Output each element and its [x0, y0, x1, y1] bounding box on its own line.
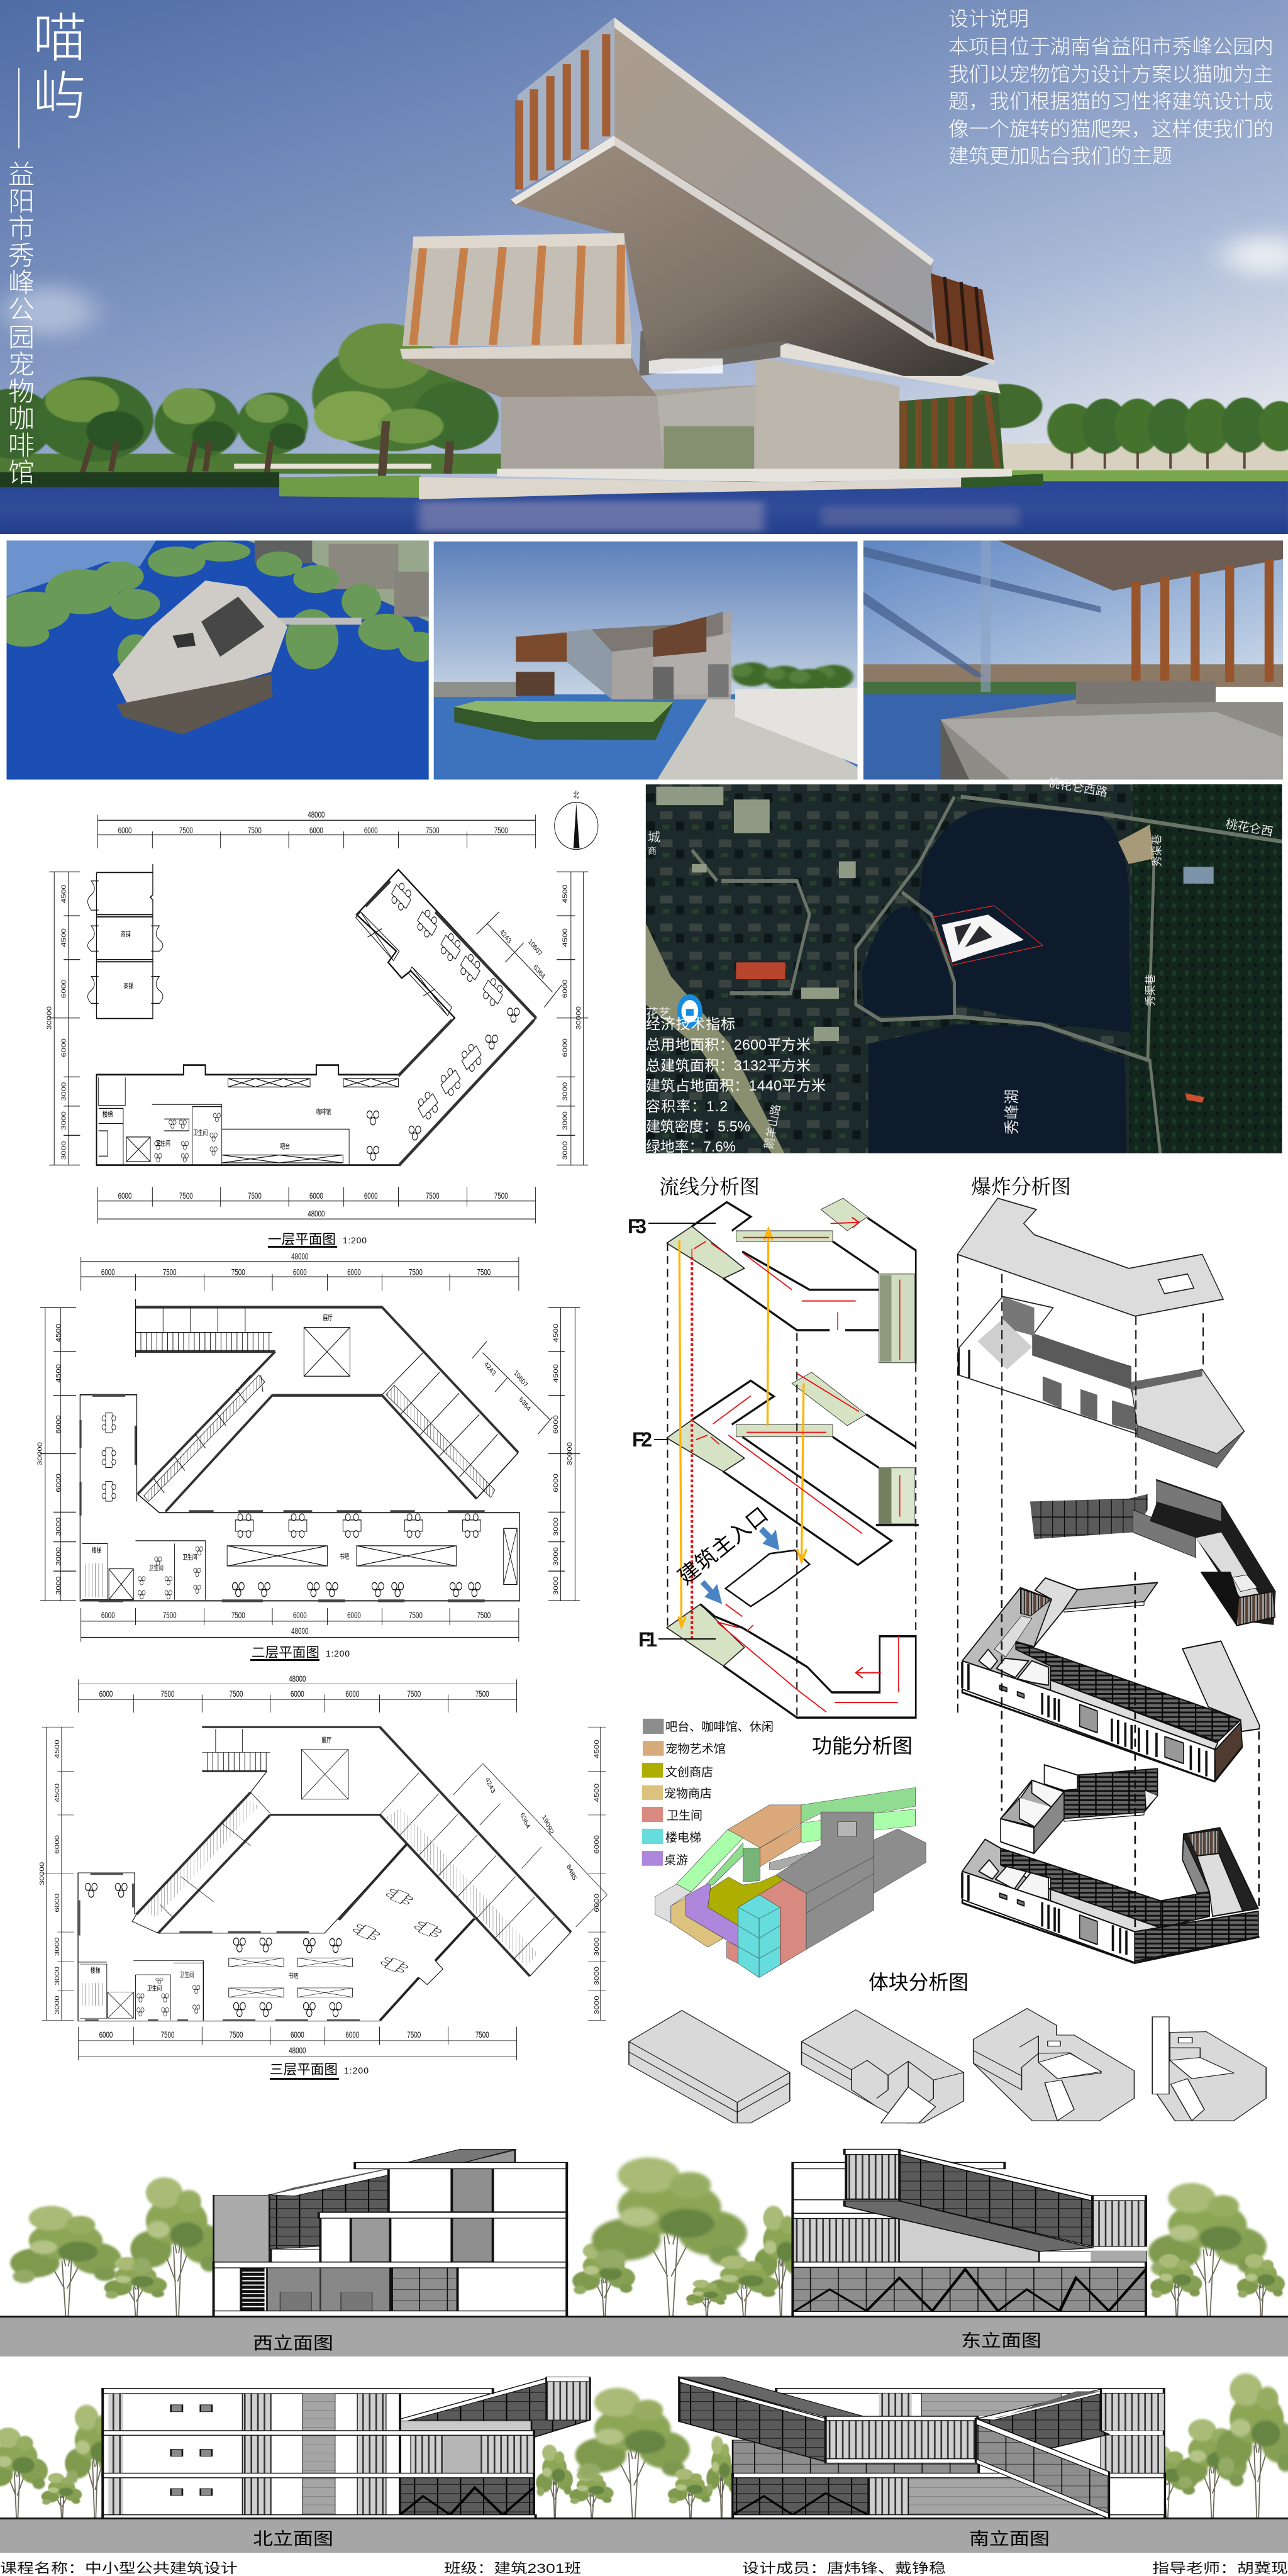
sub: first floor dimension lines: 4500	[60, 884, 67, 903]
sub: third floor dimension labels: 楼梯	[91, 1966, 100, 1974]
sub: third floor dimension labels: 6000	[99, 1690, 113, 1699]
footer: course information: 指导老师：胡冀现	[1152, 2561, 1288, 2576]
sub: second floor dimension lines: 7500	[409, 1268, 423, 1277]
sub: first floor dimension lines: 7500	[179, 826, 193, 835]
sub: first floor dimension lines: 6000	[309, 1192, 323, 1201]
sub: first floor dimension lines: 6000	[118, 1192, 132, 1201]
sub: second floor dimension lines: 7500	[477, 1611, 491, 1621]
sub: tree belt left	[0, 377, 308, 462]
sub: second floor diagonal dimension	[472, 1341, 552, 1434]
sub: second floor walls: 展厅	[323, 1314, 333, 1321]
sub: main building outline: 卫生间	[156, 1139, 170, 1147]
sub: first floor dimension lines: 3000	[562, 1111, 569, 1130]
sub: diagonal dimension	[477, 912, 562, 1008]
sub: ground level	[962, 1828, 1259, 1963]
footer: course information: 设计成员：唐炜锋、戴铮稳	[742, 2561, 946, 2576]
sub: third floor dimension labels: 6000	[54, 1893, 61, 1913]
sub: third floor dimension labels: 6000	[345, 1690, 360, 1699]
sub: third floor dimension labels: 48000	[289, 2046, 306, 2055]
sub: second floor dimension lines: 3000	[55, 1576, 62, 1595]
sub: shops block	[87, 864, 163, 1018]
sub: first floor dimension lines: 7500	[494, 826, 508, 835]
sub: second floor dimension lines: 7500	[231, 1268, 245, 1277]
sub: second floor dimension lines: 6000	[553, 1473, 559, 1492]
sub: second floor dimension lines: 4500	[553, 1363, 559, 1383]
diagram: function massing	[655, 1787, 926, 1977]
footer: course information: 班级：建筑2301班	[444, 2561, 581, 2576]
heading: function analysis: 功能分析图	[812, 1735, 913, 1757]
sub: third floor dimension labels: 6000	[291, 2031, 304, 2040]
heading: first floor plan: 一层平面图	[268, 1231, 336, 1247]
floor plan: third floor	[39, 1675, 607, 2080]
text block: economic indicators: 绿地率：7.6%	[646, 1138, 736, 1155]
heading: first floor plan	[268, 1231, 367, 1248]
sub: third floor dimension labels: 8485	[565, 1863, 577, 1882]
sub: third floor dimension labels: 展厅	[321, 1736, 331, 1744]
icon: blue entrance arrows	[701, 1527, 779, 1604]
sub: map place names: 秀渠巷	[1145, 974, 1157, 1006]
heading: circulation analysis: 流线分析图	[659, 1175, 760, 1198]
sub: second floor dimension lines: 6000	[293, 1268, 307, 1277]
sub: second floor dimension lines: 30000	[567, 1441, 574, 1465]
sub: diagonal dimension: 10607	[527, 937, 543, 958]
text block: economic indicators: 建筑占地面积：1440平方米	[646, 1077, 826, 1094]
heading: second floor plan	[250, 1645, 350, 1661]
sub: first floor dimension lines: 48000	[308, 810, 325, 819]
sub: third floor lines and walls	[42, 1679, 607, 2060]
sub: first floor dimension lines: 3000	[60, 1141, 67, 1160]
sub: first floor dimension lines: 3000	[60, 1111, 67, 1130]
sub: F3 level	[667, 1198, 916, 1364]
sub: first floor dimension lines: 6000	[562, 979, 569, 998]
sub: third floor dimension labels: 48000	[289, 1675, 306, 1684]
sub: west trees	[10, 2157, 747, 2317]
sub: big foreground tree	[312, 323, 499, 451]
sub: second level upper wing	[1016, 1572, 1275, 1731]
sub: third floor dimension labels: 7500	[161, 1690, 175, 1699]
sub: third floor dimension labels: 卫生间	[179, 1970, 194, 1979]
elevation: north	[0, 2377, 614, 2519]
sub: first floor dimension lines: 4500	[562, 928, 569, 947]
sub: first floor dimension lines: 7500	[248, 1192, 262, 1201]
sub: second floor dimension lines: 4500	[55, 1363, 62, 1383]
sub: first floor dimension lines: 6000	[60, 1038, 67, 1057]
legend: function colours: 宠物艺术馆	[665, 1742, 726, 1756]
sub: second floor dimension lines: 3000	[553, 1546, 559, 1566]
sub: third floor dimension labels: 4500	[54, 1740, 61, 1758]
text block: design description	[948, 8, 1274, 167]
title: 喵屿	[33, 9, 86, 126]
legend: function colours: 楼电梯	[665, 1831, 701, 1845]
sub: map place names: 秀峰湖	[1004, 1089, 1021, 1135]
decorative title rule	[18, 68, 19, 148]
sub: second level main floor	[962, 1587, 1242, 1782]
sub: main building outline	[96, 870, 536, 1165]
elevation: east	[686, 2149, 1285, 2317]
sub: second floor diagonal dimension: 6364	[518, 1396, 531, 1413]
subtitle: vertical project name: 益阳市秀峰公园宠物咖啡馆	[8, 160, 35, 487]
sub: east trees	[686, 2183, 1285, 2317]
sub: tree belt right	[970, 384, 1288, 453]
elevation: south	[575, 2373, 1288, 2519]
heading: third floor plan	[270, 2062, 369, 2080]
sub: first floor dimension lines: 4500	[562, 884, 569, 903]
sub: shops block: 商铺	[124, 982, 133, 990]
sub: second floor dimension lines: 48000	[291, 1627, 309, 1636]
footer: course information	[0, 2561, 1288, 2576]
sub: third level parts	[958, 1296, 1244, 1468]
sub: second floor dimension lines: 6000	[553, 1415, 559, 1434]
sub: third floor dimension labels: 4243	[484, 1776, 496, 1795]
sub: third floor dimension labels: 4500	[594, 1783, 601, 1802]
sub: first floor dimension lines: 3000	[562, 1141, 569, 1160]
legend: function colours: 宠物商店	[664, 1787, 712, 1801]
sub: second floor dimension lines: 7500	[409, 1611, 423, 1621]
sub: third floor dimension labels: 6000	[54, 1835, 61, 1854]
sub: first floor dimension lines: 7500	[248, 826, 262, 835]
sub: main building outline: 楼梯	[103, 1109, 113, 1119]
heading: second floor plan: 1:200	[326, 1648, 350, 1658]
sub: massing step four	[1152, 2017, 1266, 2121]
heading: exploded analysis: 爆炸分析图	[971, 1175, 1071, 1198]
sub: dashed level connectors	[667, 1243, 916, 1718]
text block: design description: 设计说明	[948, 8, 1029, 30]
ground band: upper elevations	[0, 2316, 1288, 2357]
panel: hero rendering	[0, 0, 1288, 534]
sub: second floor dimension lines: 7500	[163, 1611, 177, 1621]
sub: third floor dimension labels: 6000	[291, 1690, 304, 1699]
sub: third floor dimension labels: 30000	[39, 1862, 45, 1885]
sub: first floor dimension lines: 6000	[60, 979, 67, 998]
diagram: exploded axonometric	[957, 1198, 1276, 1963]
sub: second floor dimension lines: 6000	[101, 1268, 115, 1277]
sub: first floor dimension lines: 30000	[46, 1006, 53, 1030]
sub: main building outline: 吧台	[280, 1142, 290, 1150]
sub: third floor dimension labels: 4500	[54, 1783, 61, 1802]
sub: third floor dimension labels: 3000	[54, 1937, 61, 1956]
sub: first floor dimension lines: 6000	[309, 826, 323, 835]
label: east elevation: 东立面图	[961, 2331, 1041, 2350]
sub: map place names: 桃花仑西	[1224, 817, 1274, 839]
sub: third floor dimension labels: 书吧	[288, 1972, 299, 1980]
text block: economic indicators: 总建筑面积：3132平方米	[646, 1057, 811, 1074]
sub: first floor dimension lines: 3000	[60, 1082, 67, 1101]
sub: second floor walls: 书吧	[339, 1553, 350, 1560]
sub: map place names	[646, 775, 1274, 1150]
sub: first floor dimension lines: 6000	[562, 1038, 569, 1057]
sub: map place names: 城	[648, 830, 660, 845]
text block: design description: 建筑更加贴合我们的主题	[948, 145, 1172, 167]
icon: north arrow: 北	[573, 791, 579, 800]
sub: second floor dimension lines: 6000	[347, 1268, 361, 1277]
text block: economic indicators: 总用地面积：2600平方米	[646, 1036, 811, 1053]
sub: third floor dimension labels: 6364	[519, 1811, 531, 1831]
sub: map place names: 鹅羊山路	[762, 1103, 782, 1150]
heading: second floor plan: 二层平面图	[252, 1645, 319, 1660]
sub: third floor dimension labels: 卫生间	[147, 1984, 162, 1992]
sub: orange vertical routes	[679, 1229, 807, 1626]
sub: second floor dimension lines: 6000	[55, 1415, 62, 1434]
legend: function colours	[642, 1719, 774, 1867]
sub: third floor dimension labels: 7500	[161, 2031, 175, 2040]
label: level names	[628, 1215, 716, 1651]
sub: lower glass floor	[501, 385, 760, 469]
heading: first floor plan: 1:200	[343, 1235, 367, 1245]
sub: second floor dimension lines: 6000	[293, 1611, 307, 1621]
sub: second floor walls: 卫生间	[148, 1563, 164, 1572]
diagram: circulation analysis	[628, 1198, 919, 1718]
sub: second floor dimension lines: 7500	[477, 1268, 491, 1277]
sub: first floor dimension lines	[46, 810, 588, 1223]
sub: second floor walls	[80, 1299, 519, 1601]
sub: third floor dimension labels: 6000	[345, 2031, 360, 2040]
sub: second floor dimension lines: 48000	[291, 1252, 309, 1262]
ground band: lower elevations	[0, 2518, 1288, 2553]
label: level names: F3	[628, 1215, 647, 1238]
heading: third floor plan: 1:200	[344, 2065, 369, 2075]
title: 喵屿: 屿	[33, 67, 86, 126]
sub: second floor walls: 楼梯	[92, 1546, 101, 1554]
sub: south trees	[575, 2373, 1288, 2519]
sub: third floor dimension labels: 7500	[407, 2031, 421, 2040]
legend: function colours: 文创商店	[665, 1765, 713, 1779]
sub: second floor diagonal dimension: 10607	[513, 1368, 529, 1390]
sub: first floor dimension lines: 6000	[364, 826, 378, 835]
sub: massing step two	[802, 2010, 963, 2123]
sub: third floor dimension labels: 7500	[230, 2031, 243, 2040]
sub: second floor dimension lines: 7500	[163, 1268, 177, 1277]
heading: third floor plan: 三层平面图	[270, 2062, 338, 2077]
text block: economic indicators: 容积率：1.2	[646, 1098, 728, 1114]
sub: third floor dimension labels: 7500	[407, 1690, 421, 1699]
sub: third floor dimension labels: 6000	[594, 1893, 601, 1913]
sub: shops block: 商铺	[121, 930, 131, 938]
sub: red dotted vertical route	[690, 1257, 694, 1639]
sub: third floor dimension labels: 3000	[594, 1996, 601, 2014]
text block: economic indicators: 建筑密度：5.5%	[646, 1118, 750, 1135]
legend: function colours: 卫生间	[667, 1809, 702, 1823]
sub: third floor dimension labels: 7500	[475, 2031, 489, 2040]
sub: map place names: 花艺	[646, 1006, 671, 1021]
sub: first floor dimension lines: 7500	[426, 826, 440, 835]
sub: first floor dimension lines: 3000	[562, 1082, 569, 1101]
sub: massing step one	[629, 2011, 790, 2123]
sub: second floor diagonal dimension: 4243	[483, 1360, 497, 1378]
text block: design description: 我们以宠物馆为设计方案以猫咖为主	[948, 63, 1274, 86]
sub: third floor dimension labels: 3000	[594, 1966, 601, 1985]
sub: lower-left box	[402, 234, 633, 346]
sub: upper cantilever	[509, 136, 996, 376]
sub: third floor dimension labels: 19092	[541, 1813, 555, 1836]
sub: second floor dimension lines: 3000	[553, 1517, 559, 1536]
text block: design description: 像一个旋转的猫爬架，这样使我们的	[948, 118, 1274, 140]
heading: massing analysis: 体块分析图	[869, 1971, 969, 1994]
sub: third floor dimension labels: 6000	[99, 2031, 113, 2040]
photo: aerial view	[0, 540, 438, 780]
label: level names: F1	[638, 1628, 657, 1651]
sub: first floor dimension lines: 7500	[426, 1192, 440, 1201]
sub: map place names: 秀渠巷	[1151, 835, 1163, 867]
sub: third floor dimension labels: 3000	[594, 1937, 601, 1956]
photo: lakeside view	[434, 541, 858, 780]
sub: second floor dimension lines: 7500	[231, 1611, 245, 1621]
sub: diagonal dimension: 4243	[499, 928, 513, 946]
sub: second floor dimension lines: 6000	[55, 1473, 62, 1492]
sub: massing step three	[974, 2009, 1134, 2121]
sub: first floor dimension lines: 6000	[364, 1192, 378, 1201]
sub: third floor dimension labels: 4500	[594, 1740, 601, 1758]
elevation: west	[10, 2149, 747, 2317]
sub: first floor dimension lines: 30000	[575, 1006, 582, 1030]
sub: third floor dimension labels: 6000	[594, 1835, 601, 1854]
sub: second floor dimension lines: 3000	[55, 1517, 62, 1536]
sub: second floor dimension lines: 3000	[553, 1576, 559, 1595]
sub: third floor dimension labels: 7500	[475, 1690, 489, 1699]
sub: second floor walls: 卫生间	[182, 1553, 197, 1561]
sub: second floor dimension lines: 30000	[36, 1441, 43, 1465]
text block: economic indicators	[646, 1016, 826, 1155]
diagram: massing evolution	[629, 2009, 1266, 2123]
legend: function colours: 桌游	[664, 1853, 688, 1867]
sub: second floor dimension lines	[36, 1252, 580, 1642]
sub: main building outline: 卫生间	[193, 1128, 208, 1136]
sub: third floor dimension labels: 3000	[54, 1996, 61, 2014]
sub: second level pieces	[1030, 1479, 1276, 1625]
sub: map place names: 桃花仑西路	[1047, 775, 1109, 799]
sub: second floor dimension lines: 6000	[347, 1611, 361, 1621]
sub: second floor dimension lines: 4500	[553, 1323, 559, 1342]
sub: second floor dimension lines: 3000	[55, 1546, 62, 1566]
sub: first floor dimension lines: 6000	[118, 826, 132, 835]
label: north elevation: 北立面图	[253, 2529, 333, 2548]
sub: first floor dimension lines: 4500	[60, 928, 67, 947]
sub: map place names: 商	[648, 846, 657, 856]
sub: third floor dimension labels: 7500	[230, 1690, 243, 1699]
text block: design description: 题，我们根据猫的习性将建筑设计成	[948, 90, 1274, 113]
sub: red arrows	[692, 1223, 900, 1632]
floor plan: second floor	[36, 1252, 580, 1661]
photo: interior view	[863, 540, 1283, 780]
sub: diagonal dimension: 6364	[532, 963, 546, 981]
footer: course information: 课程名称：中小型公共建筑设计	[0, 2561, 238, 2576]
text block: design description: 本项目位于湖南省益阳市秀峰公园内	[948, 35, 1274, 58]
sub: third floor dimension labels: 3000	[54, 1966, 61, 1985]
sub: first floor dimension lines: 7500	[494, 1192, 508, 1201]
label: south elevation: 南立面图	[969, 2529, 1050, 2548]
sub: first floor dimension lines: 48000	[308, 1209, 325, 1219]
icon: north arrow	[555, 791, 598, 850]
sub: north trees	[0, 2405, 614, 2519]
sub: F1 level	[667, 1550, 916, 1718]
label: main entrance: 建筑主入口	[674, 1502, 773, 1589]
sub: F2 level	[667, 1372, 919, 1565]
sub: main building outline: 咖啡馆	[316, 1108, 331, 1116]
site map: satellite image with indicators	[646, 775, 1282, 1155]
label: level names: F2	[632, 1428, 652, 1451]
text block: economic indicators: 经济技术指标	[646, 1016, 735, 1032]
sub: third floor dimension labels	[39, 1675, 601, 2055]
label: west elevation: 西立面图	[253, 2334, 333, 2353]
sub: roof slab	[957, 1198, 1223, 1316]
sub: first level upper frame	[1001, 1765, 1158, 1853]
legend: function colours: 吧台、咖啡馆、休闲	[665, 1720, 774, 1734]
floor plan: first floor	[46, 791, 598, 1248]
sub: second floor dimension lines: 6000	[101, 1611, 115, 1621]
sub: second floor dimension lines: 4500	[55, 1323, 62, 1342]
sub: first floor dimension lines: 7500	[179, 1192, 193, 1201]
title: 喵屿: 喵	[33, 9, 86, 69]
